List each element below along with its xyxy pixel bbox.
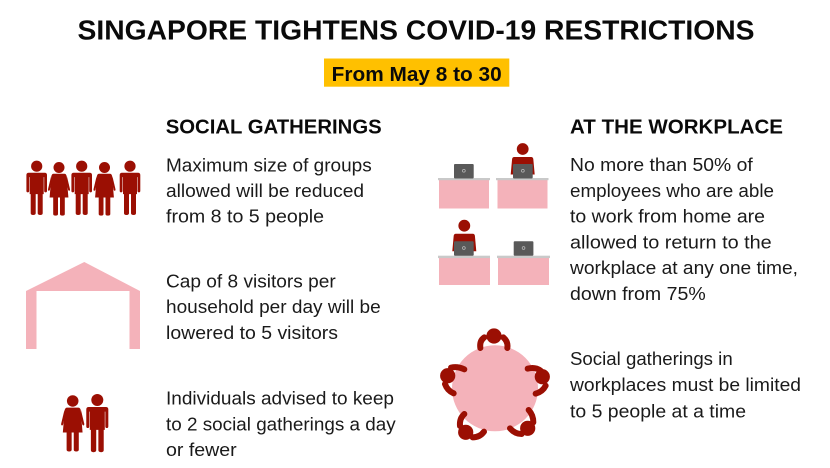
text: work from home: employees who are able (570, 180, 774, 201)
text: group size: Maximum size of groups (166, 154, 372, 175)
icon: two people (61, 394, 108, 452)
text: household visitors: Cap of 8 visitors per (166, 270, 336, 291)
text: workplace gatherings: to 5 people at a time (570, 400, 746, 421)
panel: at the workplace (438, 115, 801, 440)
text: workplace gatherings (569, 348, 801, 421)
text: group size (166, 154, 372, 227)
text: workplace gatherings: workplaces must be limited (569, 374, 801, 395)
date badge (324, 58, 509, 87)
text: work from home: workplace at any one time, (569, 257, 798, 278)
date badge: From May 8 to 30 (332, 64, 502, 86)
text: daily gatherings (166, 387, 396, 460)
text: workplace gatherings: Social gatherings in (570, 348, 733, 369)
text: household visitors (166, 270, 381, 343)
text: work from home: allowed to return to the (570, 231, 772, 252)
icon: group of five people (26, 161, 140, 216)
text: group size: allowed will be reduced (166, 180, 364, 201)
text: work from home (569, 154, 798, 304)
heading: social gatherings: SOCIAL GATHERINGS (166, 115, 382, 138)
heading: at the workplace: AT THE WORKPLACE (570, 115, 783, 138)
text: work from home: No more than 50% of (570, 154, 754, 175)
icon: house outline (26, 262, 140, 349)
title: SINGAPORE TIGHTENS COVID-19 RESTRICTIONS (78, 15, 755, 46)
icon: office desks (438, 143, 550, 285)
icon: round table meeting (440, 328, 550, 440)
text: household visitors: lowered to 5 visitors (166, 322, 338, 343)
text: household visitors: household per day will be (166, 296, 381, 317)
text: group size: from 8 to 5 people (166, 206, 324, 227)
panel: social gatherings (26, 115, 396, 460)
text: daily gatherings: or fewer (166, 439, 237, 460)
text: daily gatherings: Individuals advised to keep (166, 387, 394, 408)
text: work from home: to work from home are (570, 206, 765, 227)
text: work from home: down from 75% (570, 283, 706, 304)
text: daily gatherings: to 2 social gatherings a day (166, 413, 396, 434)
